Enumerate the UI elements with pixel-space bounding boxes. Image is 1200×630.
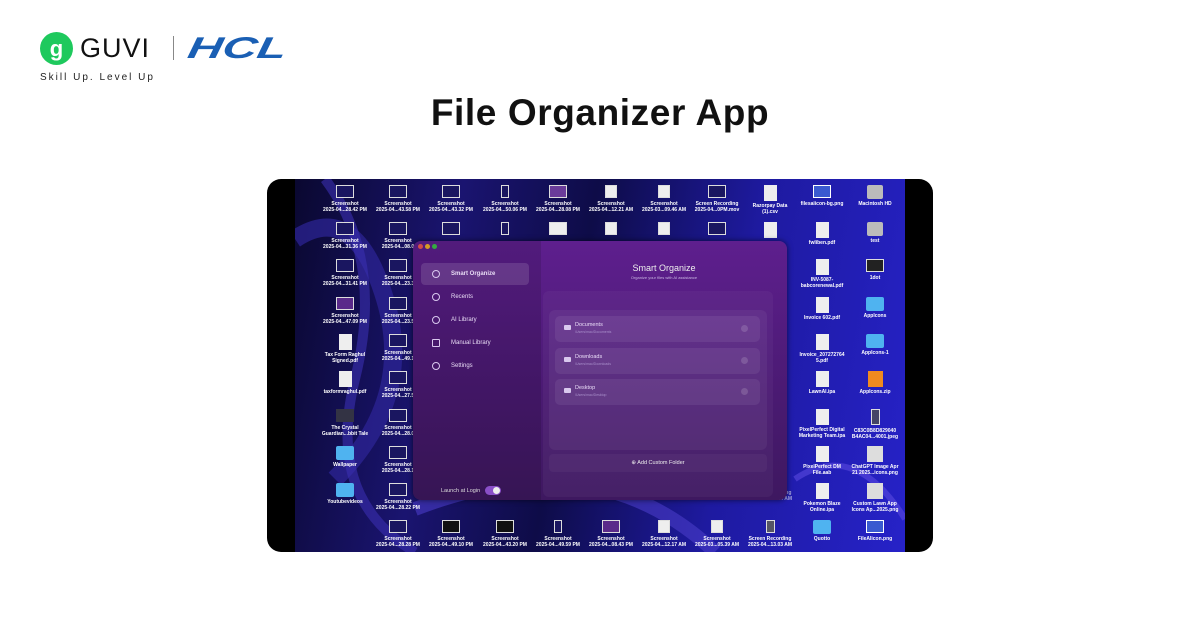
desktop icons: Invoice_207272764 — [799, 352, 845, 358]
desktop wallpaper — [295, 179, 905, 552]
desktop icons: Invoice 602.pdf — [804, 315, 840, 321]
nav: AI Library — [432, 316, 477, 324]
desktop icons: Screenshot — [491, 536, 519, 542]
desktop icons: Screenshot — [384, 313, 412, 319]
desktop icons: Screenshot — [437, 201, 465, 207]
folder: Documents: /Users/mac/Documents — [575, 330, 611, 334]
desktop icons: 2025-03...05.30 AM — [695, 496, 739, 502]
desktop icons: Screenshot — [597, 536, 625, 542]
desktop icons: Online.ipa — [810, 507, 834, 513]
desktop icons: 2025-04...08.43 PM — [589, 542, 633, 548]
button: Add Custom Folder — [549, 454, 767, 472]
nav: AI Library: AI Library — [451, 317, 477, 323]
desktop icons: Screenshot — [597, 201, 625, 207]
desktop icons: 2025-04...43.32 PM — [429, 207, 473, 213]
desktop icons: 2025-04...28.08 PM — [536, 207, 580, 213]
desktop icons: AppIcons-1 — [861, 350, 889, 356]
icon: guvi green circle — [40, 32, 73, 65]
desktop icons: 2025-04...48.48 PM — [429, 496, 473, 502]
desktop icons: Screen Recording — [749, 536, 791, 542]
desktop icons: Screenshot — [331, 201, 359, 207]
desktop icons: 1dot — [870, 275, 880, 281]
toggle: Launch at Login — [441, 486, 501, 495]
desktop icons: fwliben.pdf — [809, 240, 835, 246]
desktop icons: 2025-04...27.5 — [382, 393, 414, 399]
nav: Settings: Settings — [451, 363, 473, 369]
nav: Manual Library: Manual Library — [451, 340, 491, 346]
desktop icons: Marketing Team.ipa — [799, 433, 845, 439]
desktop icons: Screenshot — [384, 238, 412, 244]
desktop icons: filesaiicon-bg.png — [801, 201, 843, 207]
desktop icons: 2025-04...12.24 AM — [748, 496, 792, 502]
desktop icons: Guardian...bbit Tale — [322, 431, 368, 437]
desktop icons: Macintosh HD — [858, 201, 892, 207]
desktop icons: Screenshot — [491, 201, 519, 207]
desktop icons: Screenshot — [544, 536, 572, 542]
panel: folder list — [543, 291, 773, 497]
desktop icons: 2025-04...31.36 PM — [323, 244, 367, 250]
desktop icons: C83C0B8D829040 — [854, 428, 896, 434]
desktop icons: Screenshot — [384, 462, 412, 468]
desktop icons: LawnAI.ipa — [809, 389, 835, 395]
folder: Desktop — [555, 379, 760, 405]
desktop icons: 2025-04...17.06 AM — [589, 496, 633, 502]
desktop icons: 5.pdf — [816, 358, 828, 364]
desktop icons: Screenshot — [544, 201, 572, 207]
desktop icons: Screenshot — [597, 490, 625, 496]
desktop icons: 2025-03...09.46 AM — [642, 207, 686, 213]
desktop icons: 2025-04...31.41 PM — [323, 281, 367, 287]
desktop icons: Tax Form Raghul — [325, 352, 365, 358]
desktop icons: Screenshot — [703, 490, 731, 496]
app window: Smart Organize — [413, 241, 787, 500]
folder: Downloads: /Users/mac/Downloads — [575, 362, 611, 366]
desktop icons: Screenshot — [650, 201, 678, 207]
desktop icons: ChatGPT Image Apr — [851, 464, 899, 470]
desktop icons: 2025-04...28.22 PM — [376, 505, 420, 511]
desktop icons: Screenshot — [384, 499, 412, 505]
desktop icons: Screenshot — [703, 536, 731, 542]
nav: Settings — [432, 362, 473, 370]
nav: Manual Library — [432, 339, 491, 347]
folder: Documents — [555, 316, 760, 342]
desktop icons: Screenshot — [650, 490, 678, 496]
desktop icons: 2025-04...28.0 — [382, 431, 414, 437]
desktop icons: 2025-04...12.21 AM — [589, 207, 633, 213]
header: Smart Organize: Smart Organize — [632, 263, 696, 273]
desktop icons: 2025-04...0PM.mov — [695, 207, 739, 213]
desktop icons: AppIcons.zip — [859, 389, 891, 395]
desktop icons: Screenshot — [544, 490, 572, 496]
desktop icons: Quotto — [814, 536, 830, 542]
desktop icons: The Crystal — [331, 425, 359, 431]
desktop icons: 2025-04...49.1 — [382, 356, 414, 362]
desktop icons: csv — [766, 240, 774, 246]
folder: Desktop: Desktop — [575, 385, 595, 391]
desktop icons: Razorpay Data — [753, 203, 787, 209]
desktop icons: 2025-04...43.20 PM — [483, 542, 527, 548]
desktop icons: 2025-04...47.09 PM — [323, 319, 367, 325]
desktop icons: Screenshot — [331, 313, 359, 319]
desktop icons: Screenshot — [437, 536, 465, 542]
title: File Organizer App — [431, 92, 769, 133]
desktop icons: 2025-04...23.3 — [382, 281, 414, 287]
button: Add Custom Folder: ⊕ Add Custom Folder — [631, 460, 685, 466]
folder: Downloads: Downloads — [575, 354, 602, 360]
desktop icons: 2025-04...49.59 PM — [536, 542, 580, 548]
desktop icons: 2025-04...08.0 — [382, 244, 414, 250]
desktop icons: 2025-04...28.1 — [382, 468, 414, 474]
desktop icons: INV-5087- — [811, 277, 833, 283]
folder: Documents: Documents — [575, 322, 603, 328]
desktop icons: Screenshot — [384, 275, 412, 281]
desktop icons: 2025-04...28.42 PM — [323, 207, 367, 213]
desktop icons: test — [871, 238, 879, 244]
desktop icons: Youtubevideos — [327, 499, 363, 505]
desktop icons: PixelPerfect Digital — [799, 427, 845, 433]
desktop icons: 2025-04...49.25 PM — [536, 496, 580, 502]
nav: Recents: Recents — [451, 294, 473, 300]
sidebar — [413, 241, 541, 500]
nav: Smart Organize (active): Smart Organize — [451, 271, 495, 277]
desktop icons: Custom Lawn App — [853, 501, 897, 507]
desktop icons: Screenshot — [384, 536, 412, 542]
desktop icons: 2025-03...05.39 AM — [695, 542, 739, 548]
desktop icons: 2025-04...28.28 PM — [376, 542, 420, 548]
desktop icons: 2025-04...13.03 AM — [748, 542, 792, 548]
desktop icons: taxformraghul.pdf — [324, 389, 366, 395]
desktop icons: Screenshot — [491, 490, 519, 496]
logo: GUVI HCL — [40, 32, 290, 83]
desktop icons: Screenshot — [384, 201, 412, 207]
desktop icons: Screenshot — [384, 425, 412, 431]
desktop icons: 2025-04...49.10 PM — [429, 542, 473, 548]
desktop icons: Icons Ap...2025.png — [852, 507, 898, 513]
icon: guvi green circle: g — [50, 36, 63, 61]
text: HCL: HCL — [185, 32, 290, 65]
desktop icons: 2025-04...50.06 PM — [483, 207, 527, 213]
desktop icons: Signed.pdf — [332, 358, 358, 364]
header: Smart Organize: Organize your files with AI assistance — [631, 275, 697, 280]
desktop icons: 2025-04...12.17 AM — [642, 542, 686, 548]
desktop icons: B4AC04...4001.jpeg — [852, 434, 898, 440]
tagline: Skill Up. Level Up — [40, 72, 155, 83]
desktop icons: Screenshot — [384, 350, 412, 356]
desktop icons: (1).csv — [762, 209, 778, 215]
desktop icons: Screen Recording — [696, 201, 738, 207]
desktop icons: 2025-04...12.09 AM — [642, 496, 686, 502]
desktop icons: 21 2025...icons.png — [852, 470, 898, 476]
desktop icons: Screenshot — [437, 490, 465, 496]
desktop icons: Pokemon Blaze — [804, 501, 840, 507]
desktop icons: Screenshot — [331, 238, 359, 244]
desktop icons: AM — [766, 313, 774, 319]
desktop icons: Screen Recording — [749, 490, 791, 496]
screenshot frame — [267, 179, 933, 552]
nav: Recents — [432, 293, 473, 301]
desktop icons: Screenshot — [331, 275, 359, 281]
header: Smart Organize — [631, 263, 697, 280]
desktop icons: 2025-04...32.37 PM — [483, 496, 527, 502]
desktop icons: FileAIicon.png — [858, 536, 892, 542]
desktop icons: Screenshot — [650, 536, 678, 542]
desktop icons: 2025-04...23.5 — [382, 319, 414, 325]
desktop icons: babcorenewal.pdf — [801, 283, 843, 289]
folder: Downloads — [555, 348, 760, 374]
desktop icons: AppIcons — [864, 313, 886, 319]
desktop icons: 2025-04...43.58 PM — [376, 207, 420, 213]
toggle: Launch at Login: Launch at Login — [441, 488, 480, 494]
desktop icons: File.aab — [813, 470, 831, 476]
desktop icons: Wallpaper — [333, 462, 357, 468]
nav: Smart Organize (active) — [421, 263, 529, 285]
text: GUVI: GUVI — [80, 33, 150, 63]
desktop icons: Screenshot — [384, 387, 412, 393]
desktop icons: PixelPerfect DM — [803, 464, 841, 470]
folder: Desktop: /Users/mac/Desktop — [575, 393, 607, 397]
traffic lights — [418, 244, 437, 249]
